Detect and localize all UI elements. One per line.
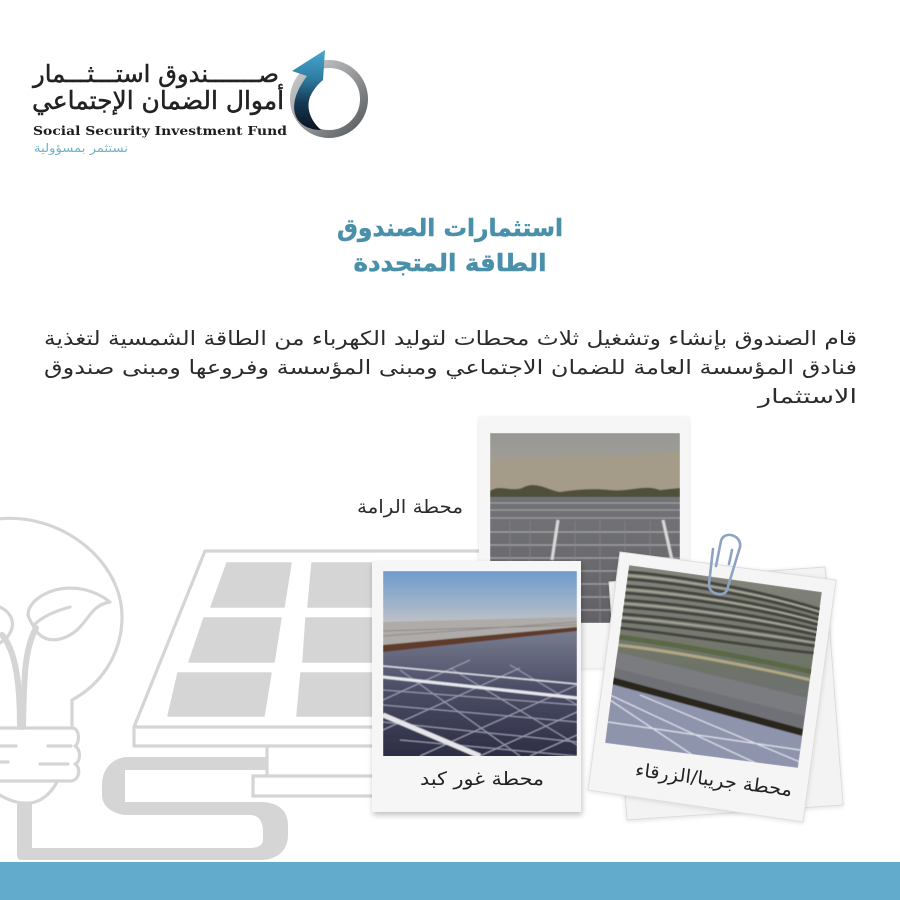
paragraph line 2: فنادق المؤسسة العامة للضمان الاجتماعي ومبنى المؤسسة وفروعها ومبنى صندوق [44,356,857,379]
title [337,214,563,277]
icon: power cable [17,757,288,860]
photo card: Ghor Kabed station [372,561,581,812]
body paragraph [44,327,857,408]
caption: Jreiba / Zarqa station: محطة جريبا/الزرقاء [634,760,793,801]
photo: solar rows [605,565,822,768]
icon: light bulb with plant [0,518,122,803]
bottom colour band [0,862,900,900]
caption: Al-Rama station: محطة الرامة [357,497,463,518]
paragraph line 3: الاستثمار [757,385,857,408]
title line 1: استثمارات الصندوق [337,214,563,242]
photo stack: Jreiba / Zarqa station [588,535,843,822]
photo card: Al-Rama station [479,417,689,668]
icon: paperclip [709,535,740,594]
background illustration: bulb and solar panel [0,518,480,860]
back paper sheet [609,567,843,820]
caption: Ghor Kabed station: محطة غور كبد [420,769,544,790]
logo tagline: نستثمر بمسؤولية [34,141,128,156]
logo Arabic name line 2: أموال الضمان الإجتماعي [32,83,284,115]
logo mark: ring and arrow [292,50,364,134]
title line 2: الطاقة المتجددة [354,249,546,277]
logo Arabic name line 1: صـــــــندوق استـــثـــمار [32,60,279,88]
paragraph line 1: قام الصندوق بإنشاء وتشغيل ثلاث محطات لتوليد الكهرباء من الطاقة الشمسية لتغذية [44,327,857,351]
front photo frame [588,552,836,822]
logo English name: Social Security Investment Fund [33,123,287,138]
icon: solar panel [134,551,480,796]
logo [32,50,364,156]
